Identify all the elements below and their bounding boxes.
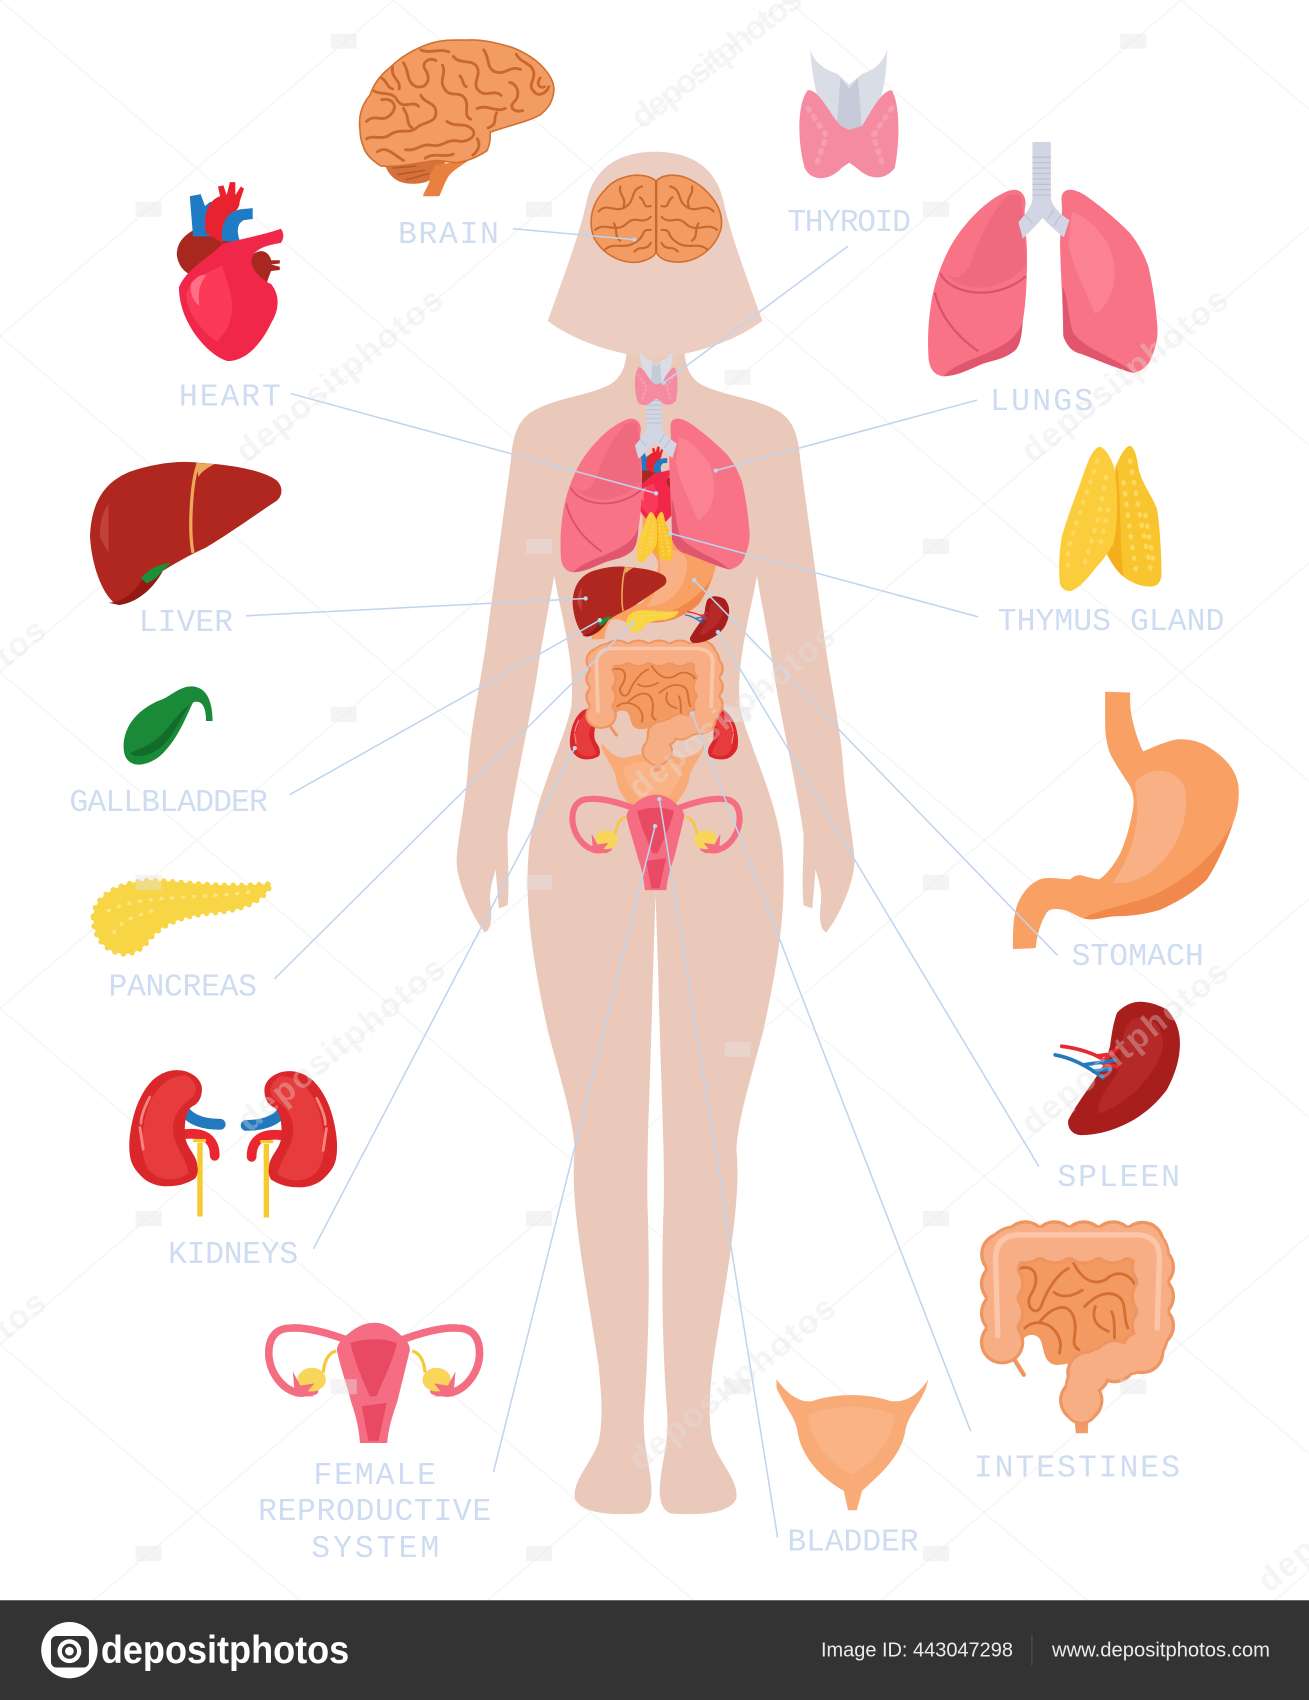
thyroid, large xyxy=(799,49,898,178)
ovaries xyxy=(298,1368,326,1392)
gallbladder, large xyxy=(124,686,213,765)
footer bar xyxy=(0,1600,1309,1700)
stock watermarks: depositphotos xyxy=(1014,953,1236,1142)
left lung xyxy=(928,190,1027,376)
head and hair xyxy=(548,152,762,358)
left half of body xyxy=(457,345,656,1514)
organs inside body xyxy=(561,349,750,890)
label: thymus gland: THYMUS GLAND xyxy=(998,605,1224,640)
liver, large xyxy=(90,462,281,605)
label: spleen: SPLEEN xyxy=(1057,1161,1180,1196)
label: intestines: INTESTINES xyxy=(974,1452,1180,1487)
spleen, large xyxy=(1055,1002,1180,1135)
stomach in body xyxy=(592,511,716,639)
intestines in body xyxy=(596,649,713,772)
left kidney xyxy=(129,1070,220,1216)
intestines, large xyxy=(996,1235,1159,1433)
bladder in body xyxy=(602,743,705,832)
spleen in body xyxy=(685,596,729,643)
kidney body xyxy=(129,1070,202,1186)
colon highlight xyxy=(996,1235,1159,1336)
right half of body xyxy=(656,345,855,1514)
liver in body xyxy=(573,567,666,637)
colon outer rim xyxy=(1002,1242,1153,1407)
label: heart: HEART xyxy=(179,380,281,415)
label: female reproductive system: FEMALE xyxy=(313,1459,436,1494)
heart, large xyxy=(177,182,283,361)
label: brain: BRAIN xyxy=(398,218,499,253)
thyroid in body xyxy=(635,349,678,405)
fallopian tubes xyxy=(269,1328,480,1393)
label: gallbladder: GALLBLADDER xyxy=(69,786,268,821)
footer website: www.depositphotos.com xyxy=(1051,1639,1270,1662)
label: female reproductive system: REPRODUCTIVE xyxy=(258,1495,491,1530)
heart in body xyxy=(634,447,681,525)
stock watermarks: depositphotos xyxy=(622,617,843,806)
appendix xyxy=(1015,1361,1024,1375)
label: pancreas: PANCREAS xyxy=(108,970,257,1005)
label: female reproductive system xyxy=(258,1459,491,1567)
pancreas in body xyxy=(627,610,678,632)
footer image id: Image ID: 443047298 xyxy=(821,1639,1013,1662)
left kidney in body xyxy=(570,708,602,759)
stock watermarks: depositphotos xyxy=(622,1289,843,1479)
fimbriae xyxy=(293,1371,455,1396)
label: lungs: LUNGS xyxy=(990,385,1093,420)
leader lines xyxy=(246,229,1057,1537)
label: female reproductive system: SYSTEM xyxy=(311,1532,439,1567)
brain, large xyxy=(360,40,554,196)
female reproductive system, large xyxy=(269,1323,480,1443)
reproductive system in body xyxy=(572,795,740,890)
kidneys, large xyxy=(129,1070,337,1218)
label: thyroid: THYROID xyxy=(787,206,911,241)
label: stomach: STOMACH xyxy=(1071,940,1204,975)
small intestine xyxy=(1011,1258,1145,1365)
right kidney in body xyxy=(706,708,738,759)
body silhouette xyxy=(457,152,855,1514)
rectum tip xyxy=(1074,1409,1089,1433)
stock watermarks: depositphotos xyxy=(1014,281,1236,470)
footer logo icon xyxy=(41,1622,98,1678)
trachea and bronchi xyxy=(1018,142,1069,239)
stock watermarks: depositphotos xyxy=(229,281,450,470)
label: liver: LIVER xyxy=(139,606,233,641)
bladder, large xyxy=(777,1379,928,1510)
label: kidneys: KIDNEYS xyxy=(168,1238,298,1273)
uterus body xyxy=(337,1323,410,1443)
brain inside head xyxy=(591,175,722,262)
thymus gland, large xyxy=(1059,446,1162,591)
stock watermarks: depositphotos xyxy=(231,950,453,1139)
footer brand name: depositphotos xyxy=(101,1629,349,1672)
thymus in body xyxy=(637,512,673,562)
lungs, large xyxy=(928,142,1158,376)
right lung xyxy=(1060,190,1158,373)
colon fill xyxy=(1002,1242,1153,1407)
lungs in body xyxy=(561,379,750,572)
stomach, large xyxy=(1013,692,1239,949)
right kidney xyxy=(246,1071,337,1218)
label: bladder: BLADDER xyxy=(787,1525,919,1560)
pancreas, large xyxy=(93,880,271,954)
ovary ligaments xyxy=(323,1351,425,1373)
